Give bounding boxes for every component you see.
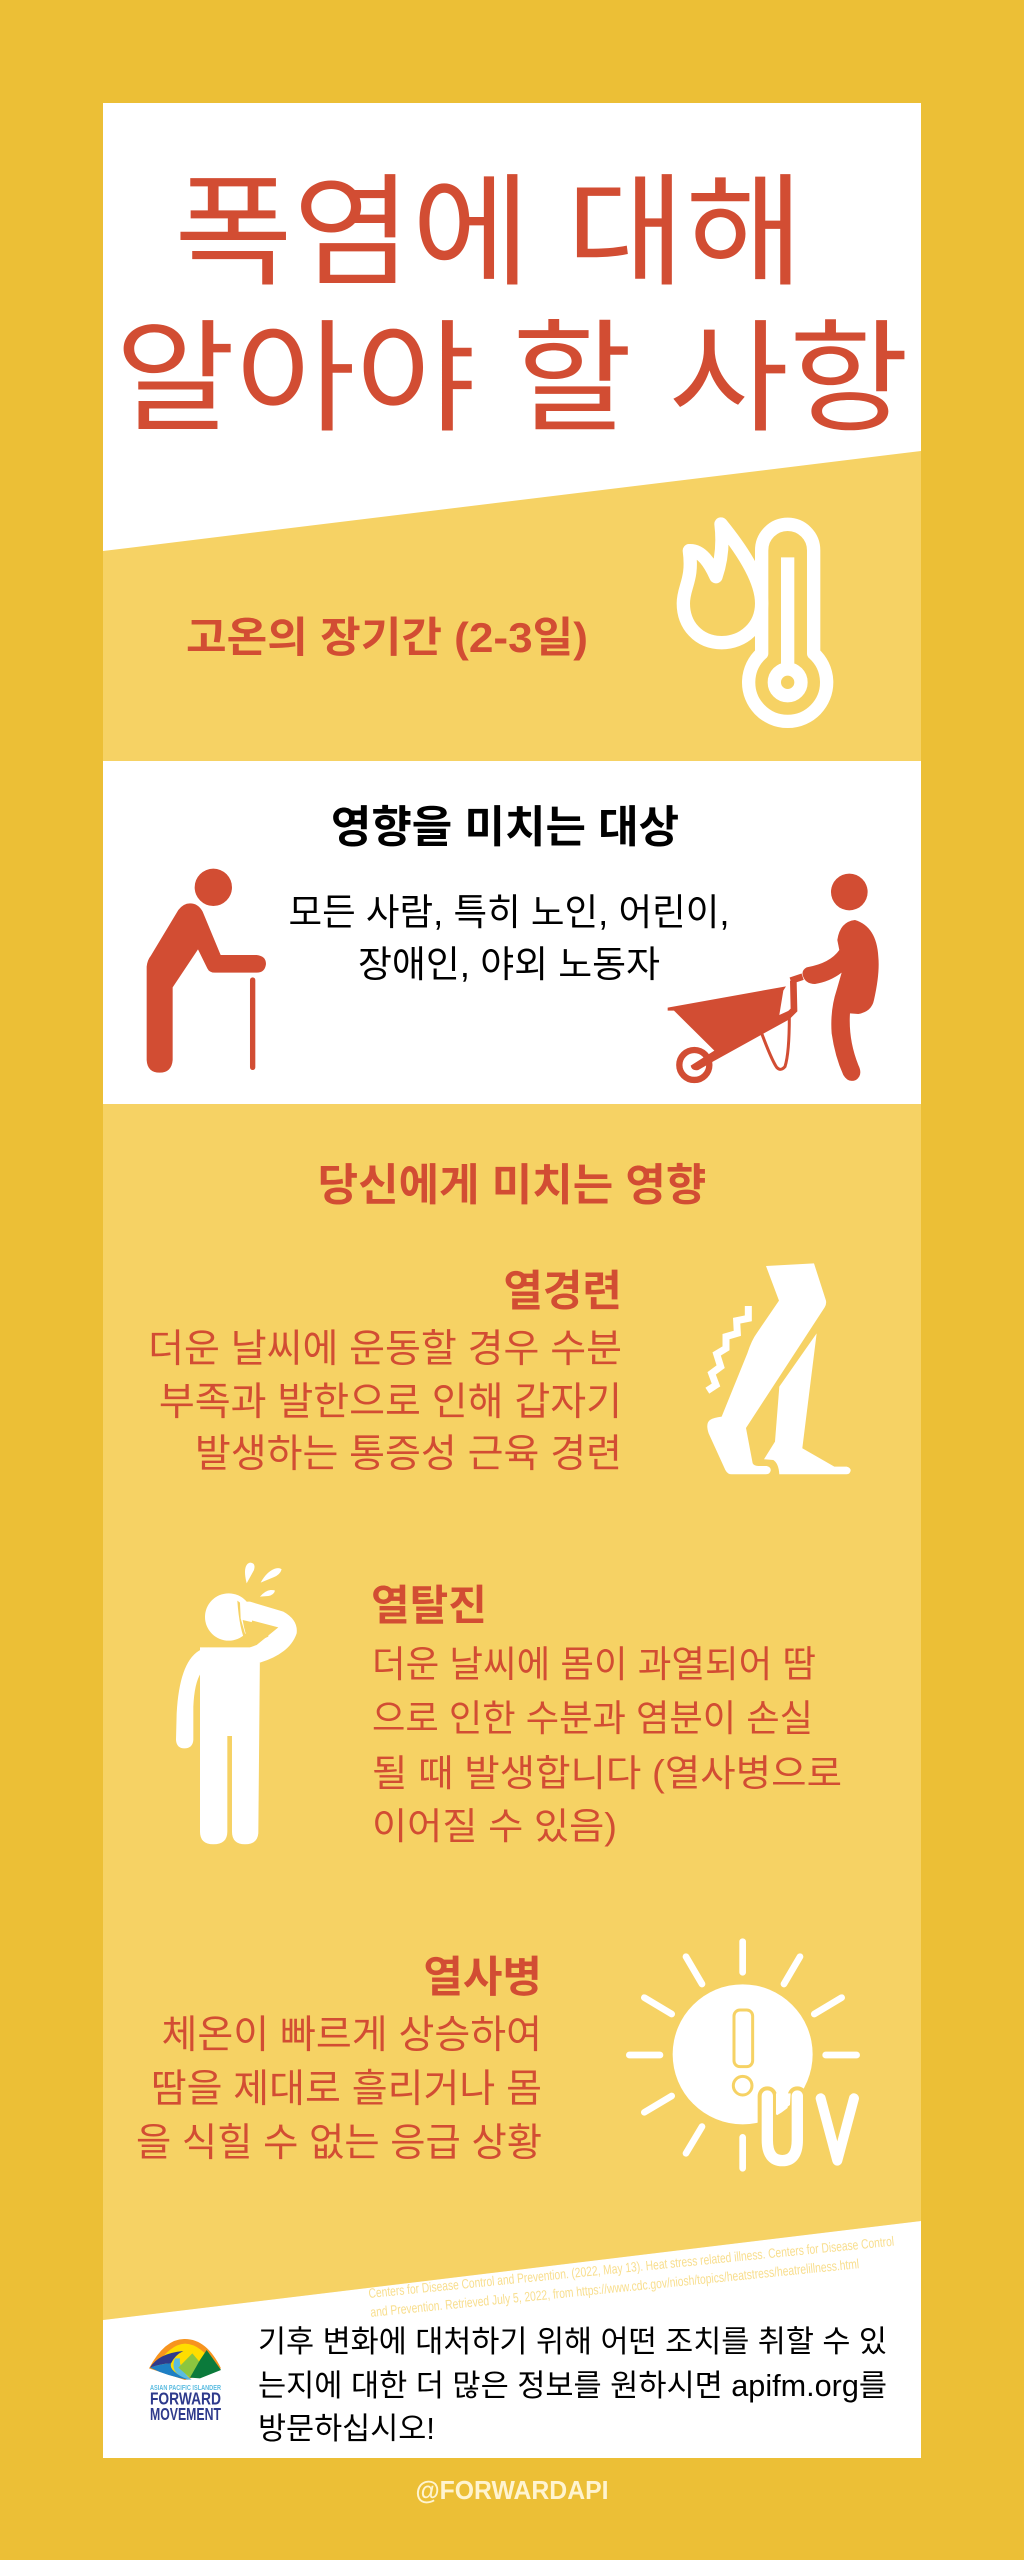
text: call to action: 기후 변화에 대처하기 위해 어떤 조치를 취할 수 있 <box>258 2325 887 2359</box>
text: call to action: 방문하십시오! <box>258 2412 435 2446</box>
heading: effects on you: 당신에게 미치는 영향 <box>318 1161 706 1210</box>
text: heat cramps <box>148 1268 622 1476</box>
text: heat exhaustion: 더운 날씨에 몸이 과열되어 땀 <box>372 1644 816 1685</box>
icon: elderly person with cane <box>147 869 266 1073</box>
text: duration: 고온의 장기간 (2-3일) <box>186 614 588 661</box>
text: affected groups: 장애인, 야외 노동자 <box>358 944 660 985</box>
text: call to action <box>258 2325 887 2446</box>
icon: sun with UV warning <box>629 1942 857 2168</box>
text: heat stroke <box>136 1954 542 2165</box>
panel: prolonged high temperature <box>103 451 921 761</box>
logo: Forward Movement: ASIAN PACIFIC ISLANDER <box>150 2383 221 2392</box>
text: heat cramps: 부족과 발한으로 인해 갑자기 <box>159 1381 622 1424</box>
title: 알아야 할 사항 <box>115 311 909 447</box>
text: heat cramps: 더운 날씨에 운동할 경우 수분 <box>148 1328 622 1371</box>
text: heat exhaustion: 이어질 수 있음) <box>372 1806 617 1847</box>
text: heat cramps: 발생하는 통증성 근육 경련 <box>195 1433 622 1476</box>
panel: title <box>103 103 921 761</box>
icon: flame and thermometer <box>683 524 827 721</box>
icon: leg cramp <box>707 1263 851 1474</box>
text: call to action: 는지에 대한 더 많은 정보를 원하시면 apifm.org를 <box>258 2369 887 2403</box>
text: heat stroke: 열사병 <box>423 1954 542 2002</box>
text: citation: and Prevention. Retrieved July 5, 2022, from https://www.cdc.gov/niosh/topics/heatstress/heatrelillness.html <box>370 2256 860 2320</box>
text: heat stroke: 체온이 빠르게 상승하여 <box>162 2014 542 2057</box>
text: heat exhaustion: 될 때 발생합니다 (열사병으로 <box>372 1753 842 1794</box>
text: heat cramps: 열경련 <box>503 1268 622 1316</box>
title: 폭염에 대해 <box>174 165 804 301</box>
icon: sweating person <box>176 1563 297 1844</box>
text: heat exhaustion: 열탈진 <box>371 1582 487 1629</box>
panel: who is affected <box>103 761 921 1104</box>
panel: effects on you <box>103 1104 921 2320</box>
panel: footer <box>103 2221 921 2458</box>
text: heat stroke: 땀을 제대로 흘리거나 몸 <box>151 2068 542 2111</box>
heading: who is affected: 영향을 미치는 대상 <box>331 803 679 852</box>
text: social handle: @FORWARDAPI <box>416 2475 608 2505</box>
title <box>115 165 909 447</box>
text: affected groups <box>288 892 730 985</box>
logo: Forward Movement <box>149 2339 221 2424</box>
logo: Forward Movement: MOVEMENT <box>150 2404 221 2424</box>
text: heat exhaustion: 으로 인한 수분과 염분이 손실 <box>372 1698 813 1739</box>
text: affected groups: 모든 사람, 특히 노인, 어린이, <box>288 892 730 933</box>
logo: Forward Movement: FORWARD <box>150 2389 221 2409</box>
text: heat stroke: 을 식힐 수 없는 응급 상황 <box>136 2122 542 2165</box>
icon: worker with wheelbarrow <box>668 874 879 1081</box>
text: heat exhaustion <box>371 1582 842 1847</box>
